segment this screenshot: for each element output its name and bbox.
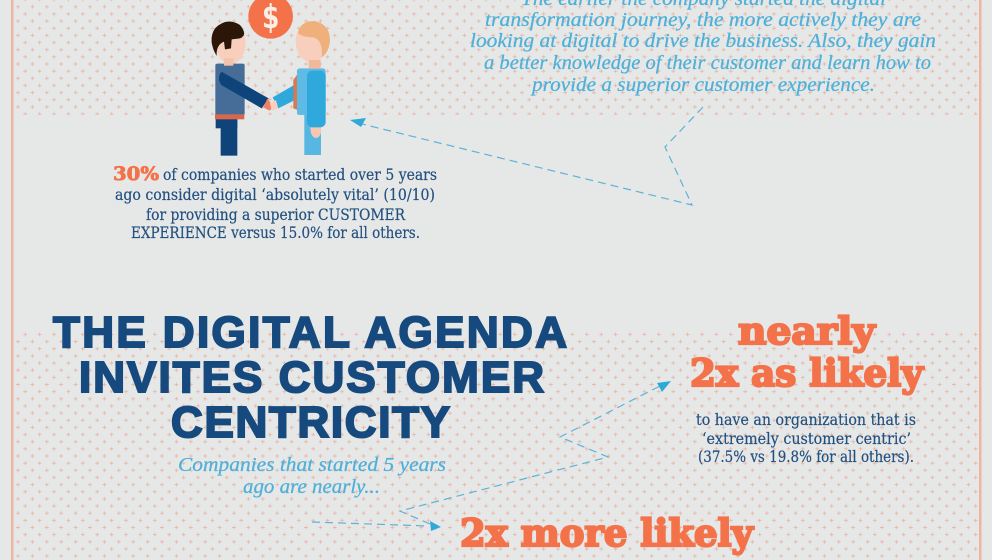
callout: nearly 2x as likely: nearly <box>738 309 877 353</box>
title <box>53 308 567 447</box>
text block: customer centric statistic <box>696 411 916 466</box>
text block: customer centric statistic: ‘extremely customer centric’ <box>702 430 911 448</box>
right border line <box>979 0 982 560</box>
callout: 2x more likely: 2x more likely <box>460 511 754 555</box>
text block: 30% statistic: ago consider digital ‘absolutely vital’ (10/10) <box>115 186 435 204</box>
figure: right man <box>270 21 330 155</box>
callout: nearly 2x as likely: 2x as likely <box>690 351 925 395</box>
text block: intro copy (italic) <box>470 0 936 96</box>
title: CENTRICITY <box>171 398 450 447</box>
arrow: dashed to 2x more likely <box>312 521 441 531</box>
text block: intro copy (italic): a better knowledge of their customer and learn how to <box>484 52 931 74</box>
text block: intro copy (italic): provide a superior customer experience. <box>530 74 875 96</box>
subheading: Companies that started 5 years <box>178 454 446 476</box>
dotted pattern band: bottom <box>15 332 978 560</box>
text block: 30% statistic <box>113 163 437 242</box>
text block: 30% statistic: of companies who started over 5 years <box>163 166 437 184</box>
figure: left man <box>212 22 274 156</box>
title: THE DIGITAL AGENDA <box>53 308 567 357</box>
icon: two businessmen shaking hands under a dollar coin <box>212 0 330 156</box>
arrow: dashed zigzag to nearly 2x as likely <box>400 381 671 524</box>
title: INVITES CUSTOMER <box>79 353 544 402</box>
icon: dollar coin <box>248 0 293 39</box>
callout: nearly 2x as likely <box>690 309 925 395</box>
text block: customer centric statistic: to have an organization that is <box>696 411 916 429</box>
text block: intro copy (italic): transformation journey, the more actively they are <box>485 9 921 31</box>
text block: 30% statistic: EXPERIENCE versus 15.0% for all others. <box>131 224 420 242</box>
dotted pattern band: top <box>15 0 978 115</box>
subheading: ago are nearly... <box>243 476 380 498</box>
text block: customer centric statistic: (37.5% vs 19.8% for all others). <box>698 448 914 466</box>
text block: 30% statistic: for providing a superior CUSTOMER <box>146 206 406 224</box>
subheading <box>178 454 446 498</box>
arrow: dashed from intro copy to handshake <box>350 107 703 205</box>
left border line <box>11 0 14 560</box>
text block: 30% statistic: 30% <box>113 163 159 185</box>
text block: intro copy (italic): looking at digital to drive the business. Also, they gain <box>470 30 936 52</box>
